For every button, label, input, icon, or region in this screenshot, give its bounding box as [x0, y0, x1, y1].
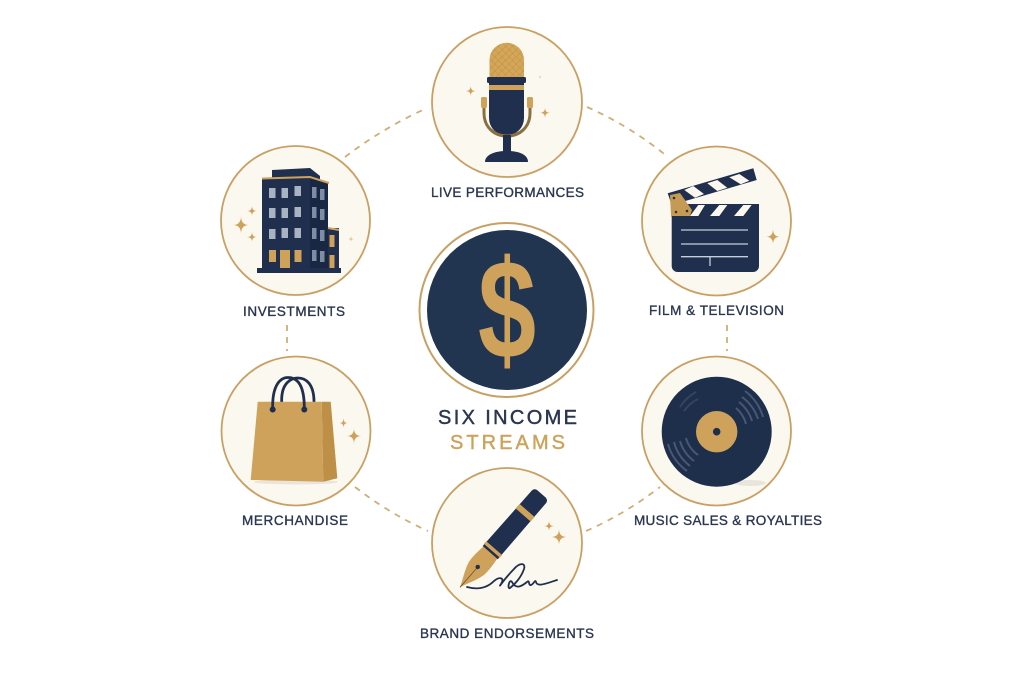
icon: microphone — [466, 43, 550, 162]
center title: SIX INCOME — [438, 407, 577, 429]
icon: fountain pen with signature — [452, 487, 567, 594]
label: merchandise: MERCHANDISE — [242, 513, 348, 528]
label: live performances: LIVE PERFORMANCES — [431, 185, 584, 200]
icon: vinyl record — [662, 377, 772, 487]
center coin with dollar sign: $ — [478, 232, 536, 389]
panel: center — [420, 223, 594, 454]
label: music sales and royalties: MUSIC SALES & ROYALTIES — [634, 513, 822, 528]
icon: office building — [233, 168, 354, 273]
center title — [438, 407, 577, 454]
center title: STREAMS — [450, 432, 565, 454]
label: investments: INVESTMENTS — [243, 304, 345, 319]
icon: shopping bag — [251, 378, 362, 484]
panel: merchandise — [222, 356, 370, 528]
panel: investments — [221, 146, 370, 319]
dashed connector ring — [287, 107, 727, 531]
center coin with dollar sign — [420, 223, 594, 397]
panel: brand endorsements — [420, 468, 594, 641]
label: brand endorsements: BRAND ENDORSEMENTS — [420, 626, 594, 641]
panel: film and television — [642, 146, 791, 318]
panel: music sales and royalties — [634, 356, 822, 528]
icon: clapperboard — [668, 168, 780, 272]
label: film and television: FILM & TELEVISION — [649, 303, 784, 318]
panel: live performances — [431, 27, 584, 200]
